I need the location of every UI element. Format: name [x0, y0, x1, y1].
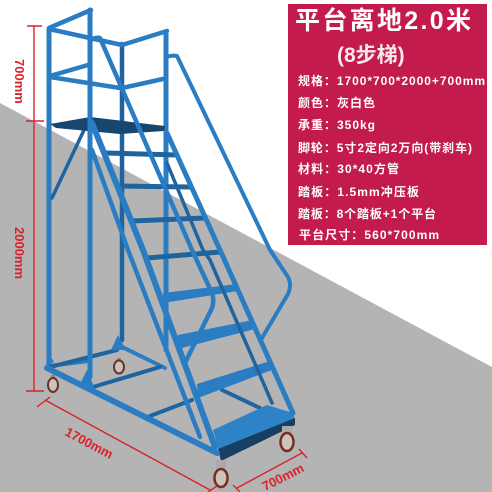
dimension: length line [37, 397, 217, 492]
ladder: left handrail [91, 38, 213, 363]
caster: front right [280, 426, 294, 451]
ladder: base beam [46, 352, 217, 453]
spec: size: 规格：1700*700*2000+700mm [298, 73, 485, 88]
ladder: platform [50, 117, 165, 134]
ladder: stair stringers [92, 123, 293, 447]
spec: load: 承重：350kg [298, 117, 375, 132]
dimension: 2000mm height: 2000mm [12, 227, 27, 279]
spec: casters: 脚轮：5寸2定向2万向(带刹车) [298, 140, 472, 155]
spec: tread count: 踏板：8个踏板+1个平台 [298, 206, 436, 221]
ladder: rear frame [49, 10, 260, 416]
dimension: width line [233, 449, 307, 492]
caster: rear left [48, 375, 58, 392]
ladder: front post [88, 10, 92, 377]
casters [48, 358, 294, 487]
background: grey floor [0, 103, 492, 492]
panel: specifications [288, 4, 487, 245]
caster: front left [214, 460, 228, 487]
dimension: 700mm height: 700mm [12, 59, 27, 104]
ladder: right handrail [167, 56, 290, 338]
spec: material: 材料：30*40方管 [298, 161, 399, 176]
dimension: 1700mm length: 1700mm [63, 424, 116, 462]
heading: platform height: 平台离地2.0米 [295, 6, 471, 35]
spec: platform size: 平台尺寸：560*700mm [299, 227, 439, 242]
caster: rear right [114, 358, 124, 374]
heading: step count: (8步梯) [337, 44, 405, 67]
spec: colour: 颜色：灰白色 [298, 95, 375, 110]
ladder: steps [107, 153, 295, 461]
spec: tread: 踏板：1.5mm冲压板 [298, 184, 419, 199]
dimension: vertical lines [26, 26, 44, 391]
